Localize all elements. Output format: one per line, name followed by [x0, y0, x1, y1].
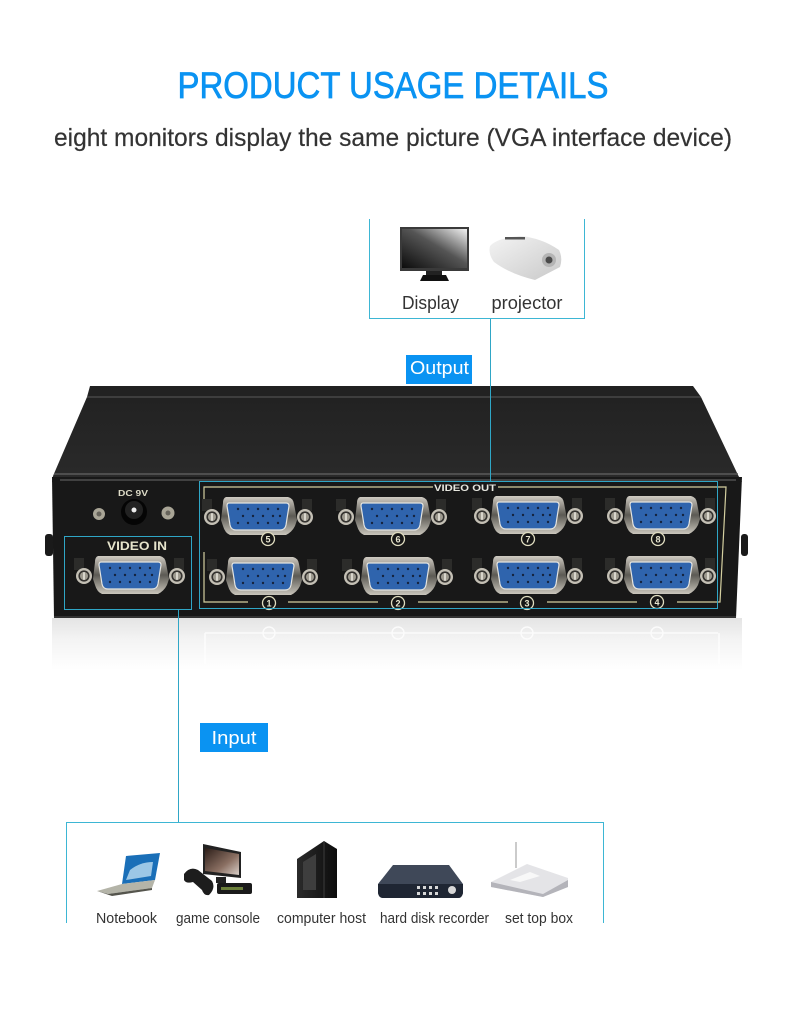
port numbers	[262, 532, 664, 610]
label: Notebook: Notebook	[96, 911, 158, 927]
badge: Input: Input	[212, 728, 256, 748]
connector line: output	[490, 319, 492, 481]
label: VIDEO OUT: VIDEO OUT	[434, 483, 497, 493]
port numbers: 8	[655, 534, 661, 544]
badge: Input	[200, 723, 268, 752]
label: game console: game console	[176, 911, 260, 927]
highlight frame: video out	[200, 482, 718, 608]
printed frame	[204, 487, 726, 602]
icon: display monitor	[400, 227, 469, 281]
label: Display: Display	[402, 293, 459, 313]
label: DC 9V: DC 9V	[118, 488, 148, 498]
connectors: video out	[202, 496, 716, 595]
port numbers: 7	[525, 534, 531, 544]
icon: computer host	[297, 841, 337, 898]
panel: output devices	[370, 219, 584, 318]
port numbers: 6	[395, 534, 401, 544]
reflection under device	[52, 618, 742, 670]
front face	[52, 477, 742, 618]
port numbers: 3	[524, 598, 530, 608]
badge: Output: Output	[410, 358, 469, 378]
power jack	[93, 499, 174, 525]
label: hard disk recorder: hard disk recorder	[380, 911, 489, 927]
panel: input devices	[66, 822, 604, 927]
badge: Output	[406, 355, 472, 384]
label: set top box: set top box	[505, 911, 574, 927]
label: computer host: computer host	[277, 911, 366, 927]
port numbers: 4	[654, 598, 660, 608]
device: VGA splitter	[45, 386, 748, 618]
port numbers: 1	[266, 598, 272, 608]
rubber feet	[45, 534, 53, 556]
label: VIDEO IN: VIDEO IN	[107, 539, 167, 553]
port numbers: 5	[265, 534, 271, 544]
icon: notebook	[97, 853, 160, 896]
subtitle: eight monitors display the same picture (VGA interface device)	[54, 124, 732, 152]
title: PRODUCT USAGE DETAILS	[178, 65, 608, 106]
label: projector: projector	[492, 293, 563, 313]
connector line: input	[178, 610, 180, 822]
connector: video in	[74, 556, 185, 594]
top face	[52, 386, 742, 482]
icon: hard disk recorder	[378, 865, 463, 898]
highlight frame: video in	[64, 536, 192, 610]
port numbers: 2	[395, 598, 401, 608]
icon: projector	[490, 236, 561, 280]
icon: set top box	[491, 842, 568, 897]
icon: game console	[184, 844, 252, 895]
